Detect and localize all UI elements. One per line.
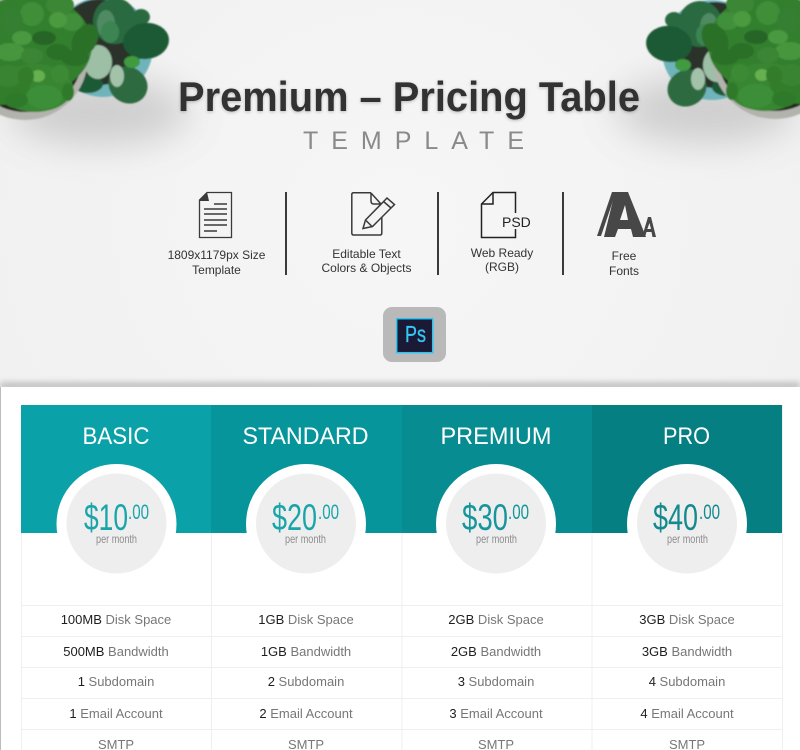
plan name: PREMIUM [440, 423, 552, 450]
price circle: .00 [318, 501, 339, 524]
price circle: .00 [128, 501, 149, 524]
price circle: per month [667, 532, 708, 546]
features: 100MB Disk Space [61, 612, 171, 627]
feature: size template [168, 192, 266, 277]
price circle [627, 464, 747, 584]
price circle: per month [96, 532, 137, 546]
price circle: .00 [508, 501, 529, 524]
plan name: PRO [663, 423, 710, 450]
price circle: .00 [699, 501, 720, 524]
price circle: per month [285, 532, 326, 546]
icon: Photoshop badge [383, 307, 446, 362]
price circle [246, 464, 366, 584]
features: 500MB Bandwidth [63, 644, 169, 659]
title: Premium – Pricing Table [178, 73, 640, 120]
features: 1GB Disk Space [258, 612, 354, 627]
features: 2 Subdomain [268, 674, 344, 689]
price circle: $30 [462, 497, 508, 538]
label: editable: Colors & Objects [321, 261, 412, 275]
table grid [21, 405, 783, 750]
price circle: $20 [272, 497, 317, 538]
plant shadow left [10, 78, 190, 146]
label: size: 1809x1179px Size [168, 248, 266, 262]
icon: document with pencil [352, 193, 394, 235]
features: 1GB Bandwidth [261, 644, 351, 659]
features: 1 Subdomain [78, 674, 154, 689]
features: 2GB Disk Space [448, 612, 544, 627]
feature: editable text [321, 193, 412, 275]
features: 3 Email Account [449, 706, 543, 721]
column: premium [402, 405, 592, 750]
label: size: Template [192, 263, 241, 277]
column: basic [21, 405, 211, 750]
label: free fonts: Free [612, 249, 637, 263]
icon: plants top right [644, 0, 800, 119]
label: web ready: Web Ready [471, 246, 533, 260]
column: standard [211, 405, 402, 750]
price circle: $10 [84, 497, 128, 538]
icon: plants top left [0, 0, 171, 120]
features [448, 612, 544, 750]
price circle [436, 464, 556, 584]
label: web ready: (RGB) [485, 260, 519, 274]
pricing card [0, 387, 800, 750]
features: 4 Email Account [640, 706, 734, 721]
features: 3 Subdomain [458, 674, 534, 689]
features: 4 Subdomain [649, 674, 725, 689]
column: pro [592, 405, 782, 750]
header band [21, 405, 211, 533]
features: 2 Email Account [259, 706, 353, 721]
feature: free fonts [597, 192, 656, 278]
price circle [56, 464, 176, 584]
card shadow [0, 382, 800, 390]
plan name: BASIC [82, 423, 150, 450]
features: 1 Email Account [69, 706, 163, 721]
label: free fonts: Fonts [609, 264, 639, 278]
plan name: STANDARD [242, 423, 368, 450]
header band [592, 405, 782, 533]
icon: font letters [597, 192, 656, 237]
features [258, 612, 354, 750]
divider [562, 192, 564, 275]
price circle: $40 [653, 497, 698, 538]
header band [211, 405, 402, 533]
features [639, 612, 735, 750]
divider [285, 192, 287, 275]
divider [437, 192, 439, 275]
features: 3GB Disk Space [639, 612, 735, 627]
label: editable: Editable Text [332, 247, 401, 261]
icon: PSD file: PSD [502, 214, 531, 230]
icon: Photoshop badge: Ps [405, 321, 426, 347]
features [61, 612, 171, 750]
features: 3GB Bandwidth [642, 644, 732, 659]
features: 2GB Bandwidth [451, 644, 541, 659]
plant shadow right [615, 76, 795, 144]
feature: web ready [471, 192, 533, 274]
header band [402, 405, 592, 533]
subtitle: TEMPLATE [303, 127, 524, 155]
price circle: per month [476, 532, 517, 546]
icon: document [199, 192, 232, 238]
